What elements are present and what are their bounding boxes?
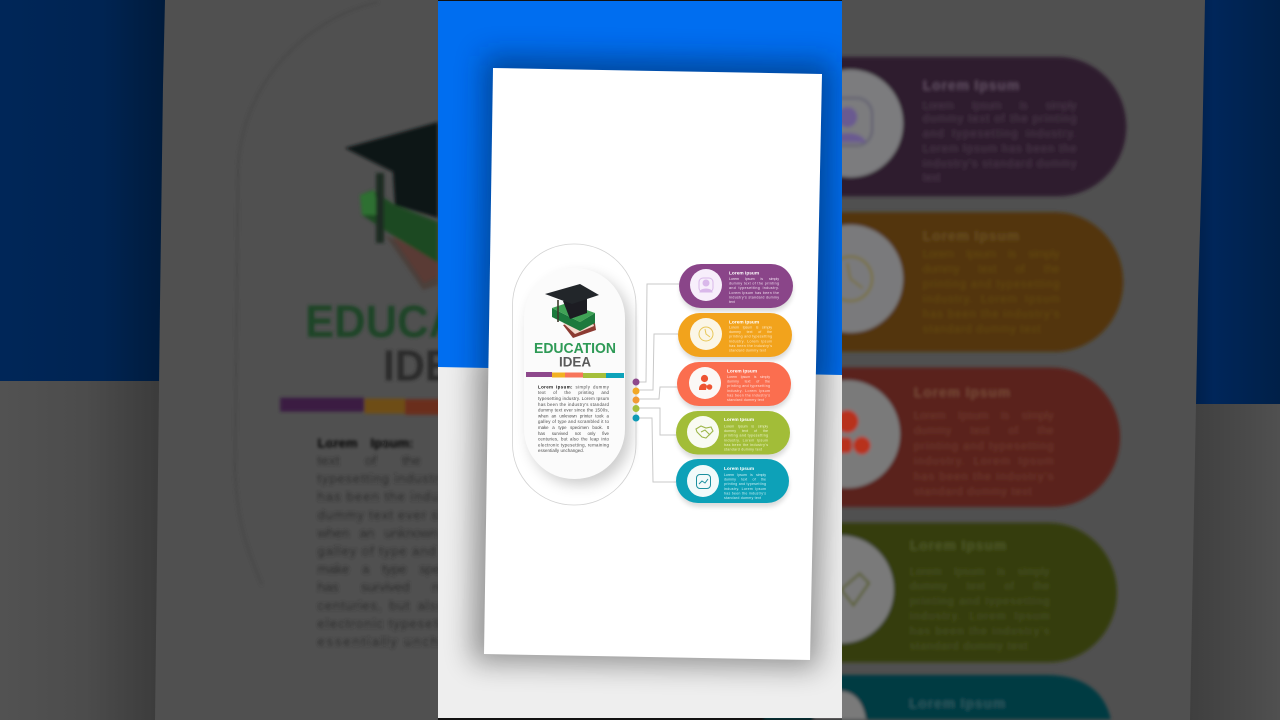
enlarged title, bar and text: EDUCATION: [305, 296, 561, 347]
icon: clock: [699, 327, 713, 341]
right blurred background: text: [923, 172, 940, 184]
enlarged title, bar and text: galley of type and scrambled it to: [318, 544, 539, 559]
teal text: Lorem Ipsum is simply: [724, 473, 766, 477]
left blurred background: [0, 0, 561, 720]
enlarged title, bar and text: when an unknown printer took a: [317, 525, 540, 540]
panel: orange item: [678, 313, 792, 357]
green text: Lorem Ipsum is simply: [724, 424, 768, 428]
right blurred background: dummy text of the: [910, 581, 1049, 593]
panel: green item: [676, 411, 790, 454]
teal text: dummy text of the: [724, 478, 766, 482]
teal text: [724, 466, 766, 500]
body text: [538, 384, 610, 453]
right blurred background: dummy text of the printing: [923, 113, 1076, 125]
white card: [524, 268, 625, 479]
right blurred background: has been the industry's: [923, 308, 1060, 320]
teal text: standard dummy text: [724, 496, 761, 500]
enlarged title, bar and text: centuries, but also the leap into: [318, 598, 539, 613]
green text: [724, 417, 768, 452]
right blurred background: Lorem Ipsum: [909, 696, 1005, 711]
body text: typesetting industry. Lorem Ipsum: [538, 396, 609, 401]
green text: standard dummy text: [724, 448, 762, 452]
right blurred background: Lorem Ipsum is simply: [923, 100, 1077, 112]
orange text: printing and typesetting: [729, 335, 772, 339]
right blurred background: industry. Lorem Ipsum: [914, 455, 1053, 468]
green text: industry. Lorem Ipsum: [724, 438, 768, 442]
orange text: Lorem Ipsum: [729, 320, 759, 326]
green text: has been the industry's: [724, 443, 768, 447]
orange text: [729, 320, 772, 352]
coral text: [727, 368, 770, 402]
enlarged title, bar and text: [280, 296, 561, 649]
enlarged title, bar and text: has survived not only five: [318, 580, 539, 595]
coral text: dummy text of the: [727, 380, 770, 384]
panel: purple item: [679, 264, 793, 308]
right blurred background: Lorem Ipsum is simply: [923, 248, 1060, 261]
orange text: industry. Lorem Ipsum: [729, 339, 772, 343]
enlarged title, bar and text: has been the industry's standard: [318, 489, 539, 504]
panel: teal item: [676, 459, 789, 503]
colour bar: [526, 372, 624, 378]
white paper sheet: [484, 68, 822, 660]
purple text: text: [729, 300, 735, 304]
purple text: [729, 270, 779, 304]
coral text: Lorem Ipsum: [727, 368, 757, 374]
coral text: has been the industry's: [727, 393, 770, 397]
green text: printing and typesetting: [724, 434, 768, 438]
purple text: and typesetting industry.: [729, 286, 779, 290]
icon: people: [699, 375, 712, 390]
coral text: industry. Lorem Ipsum: [727, 389, 770, 393]
right blurred background: industry. Lorem Ipsum: [923, 293, 1059, 306]
enlarged title, bar and text: essentially unchanged.: [318, 634, 489, 649]
enlarged title, bar and text: IDEA: [383, 341, 483, 390]
title: EDUCATION IDEA: EDUCATION: [534, 341, 616, 357]
enlarged title, bar and text: typesetting industry. Lorem Ipsum: [318, 471, 539, 486]
right blurred background: Lorem Ipsum has been the: [923, 143, 1076, 155]
right blurred background: Lorem Ipsum: [914, 385, 1010, 400]
body text: electronic typesetting, remaining: [538, 442, 610, 447]
right blurred background: industry's standard dummy: [923, 158, 1077, 170]
purple text: Lorem Ipsum is simply: [729, 277, 779, 281]
purple text: dummy text of the printing: [729, 282, 779, 286]
coral text: standard dummy text: [727, 398, 764, 402]
right blurred background: dummy text of the: [923, 263, 1059, 275]
panel: coral item: [677, 362, 791, 406]
enlarged title, bar and text: text of the printing and: [318, 453, 539, 468]
infographic: left capsule: [512, 244, 636, 505]
enlarged title, bar and text: Lorem Ipsum:: [318, 436, 413, 451]
right blurred background: has been the industry's: [914, 471, 1054, 483]
body text: centuries, but also the leap into: [538, 437, 610, 442]
teal text: Lorem Ipsum: [724, 466, 754, 472]
outline arc, cap and books, enlarged: [235, 2, 438, 585]
green text: Lorem Ipsum: [724, 417, 754, 423]
right blurred background: dummy text of the: [914, 425, 1053, 437]
teal text: industry. Lorem Ipsum: [724, 487, 766, 491]
orange text: dummy text of the: [729, 330, 772, 334]
card shadow: [529, 275, 631, 485]
pill shadows: [677, 268, 793, 507]
body text: essentially unchanged.: [538, 448, 584, 453]
body text: has survived not only five: [538, 431, 610, 436]
right blurred background: printing and typesetting: [910, 596, 1049, 608]
right blurred background: Lorem Ipsum is simply: [914, 410, 1054, 422]
body text: dummy text ever since the 1500s,: [538, 408, 609, 413]
connector dots: [632, 378, 640, 422]
right blurred background: Lorem Ipsum: [910, 538, 1006, 553]
title: EDUCATION IDEA: IDEA: [559, 354, 591, 370]
icon: graduation cap on books: [545, 284, 599, 338]
body text: make a type specimen book. It: [538, 425, 610, 430]
body text: galley of type and scrambled it to: [538, 419, 610, 424]
right blurred background: standard dummy text: [910, 640, 1028, 652]
purple text: Lorem Ipsum has been the: [729, 291, 779, 295]
icon: handshake: [696, 426, 713, 438]
right blurred background: [764, 0, 1280, 720]
right blurred background: standard dummy text: [914, 486, 1032, 498]
orange text: standard dummy text: [729, 348, 766, 352]
right blurred background: Lorem Ipsum is simply: [910, 566, 1050, 578]
right blurred background: standard dummy text: [923, 324, 1041, 336]
body text: has been the industry's standard: [538, 402, 610, 407]
body text: Lorem Ipsum: simply dummy: [538, 384, 610, 390]
coral text: printing and typesetting: [727, 384, 770, 388]
center column: blue and grey background: [438, 1, 842, 718]
right blurred background: Lorem Ipsum: [923, 78, 1019, 93]
body text: when an unknown printer took a: [538, 413, 610, 418]
icon: chart: [696, 474, 710, 488]
teal text: has been the industry's: [724, 491, 766, 495]
green text: dummy text of the: [724, 429, 768, 433]
purple text: industry's standard dummy: [729, 295, 779, 299]
orange text: has been the industry's: [729, 344, 772, 348]
enlarged title, bar and text: make a type specimen book. It: [318, 562, 539, 577]
title: EDUCATION IDEA: [534, 341, 616, 370]
right blurred background: printing and typesetting: [923, 278, 1059, 290]
connector lines: [637, 284, 680, 482]
right blurred background: and typesetting industry.: [923, 128, 1076, 140]
capsule outline: [512, 244, 636, 505]
right blurred background: printing and typesetting: [914, 440, 1053, 452]
icon: profile: [699, 278, 713, 292]
body text: text of the printing and: [538, 390, 610, 395]
right blurred background: industry. Lorem Ipsum: [910, 610, 1049, 623]
orange text: Lorem Ipsum is simply: [729, 326, 772, 330]
purple text: Lorem Ipsum: [729, 270, 759, 276]
enlarged title, bar and text: electronic typesetting, remaining: [318, 616, 539, 631]
enlarged title, bar and text: dummy text ever since the 1500s,: [318, 507, 539, 522]
coral text: Lorem Ipsum is simply: [727, 375, 770, 379]
right blurred background: has been the industry's: [910, 625, 1050, 637]
right blurred background: Lorem Ipsum: [923, 229, 1019, 244]
teal text: printing and typesetting: [724, 482, 766, 486]
